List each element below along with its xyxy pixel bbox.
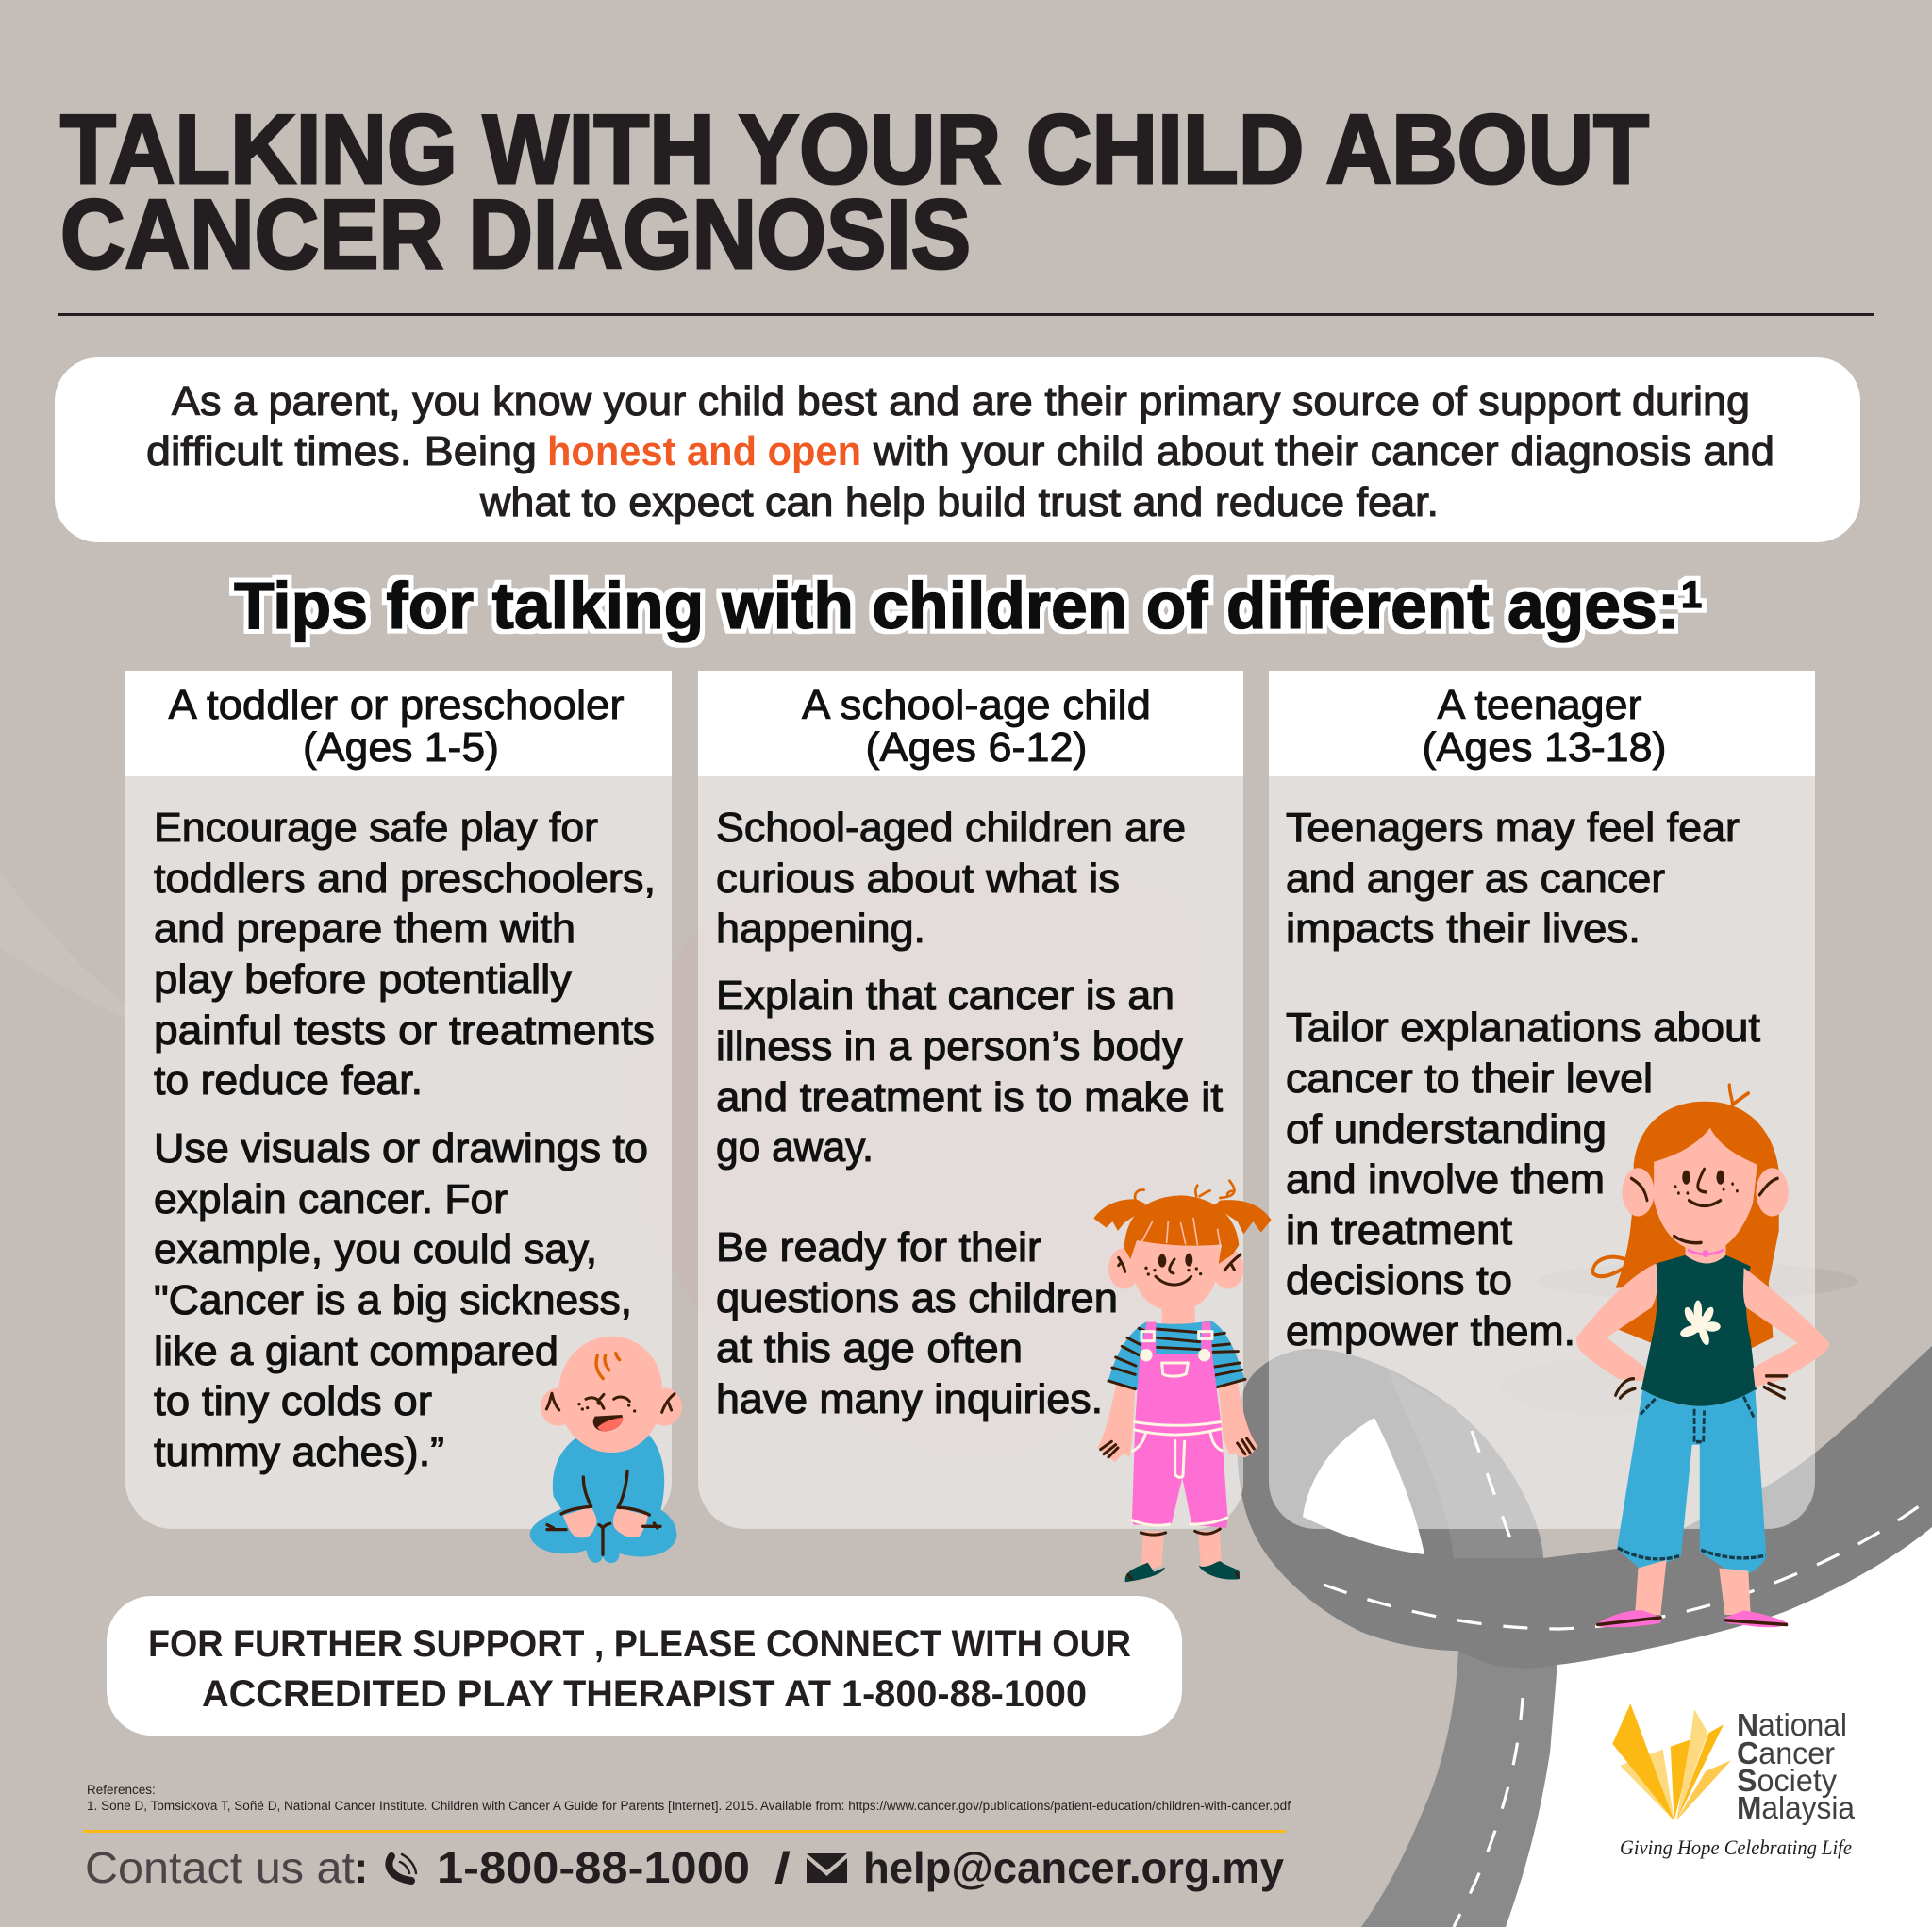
contact line: 1-800-88-1000 (437, 1843, 750, 1892)
panel: toddler or preschooler: Encourage safe play for (154, 805, 598, 851)
logo wordmark: Cancer (1737, 1736, 1835, 1770)
panel: teenager: cancer to their level (1286, 1055, 1653, 1102)
panel: teenager: Teenagers may feel fear (1286, 805, 1740, 851)
icon: envelope (807, 1853, 847, 1883)
logo fan mark (1612, 1703, 1731, 1820)
intro box: honest and open (547, 428, 861, 474)
panel: school-age child: questions as children (716, 1275, 1118, 1321)
road: lighter arm (1387, 1368, 1543, 1558)
panel: school-age child: go away. (716, 1124, 874, 1171)
panel: school-age child: Be ready for their (716, 1224, 1041, 1271)
title: CANCER DIAGNOSIS (60, 180, 971, 290)
contact line: help@cancer.org.my (863, 1843, 1284, 1892)
road: vertical stretch (1361, 1646, 1557, 1927)
panel: toddler or preschooler: explain cancer. For (154, 1176, 508, 1222)
title (60, 95, 1649, 290)
panel: teenager: in treatment (1286, 1207, 1512, 1254)
references: References: (87, 1783, 156, 1797)
panel: teenager (1269, 671, 1815, 1529)
panel: school-age child: School-aged children are (716, 805, 1186, 851)
logo wordmark: Society (1737, 1763, 1837, 1798)
tips heading: 1 (1681, 574, 1702, 616)
panel: teenager: A teenager (1438, 682, 1641, 728)
logo: National Cancer Society Malaysia (1612, 1703, 1856, 1859)
panel: teenager: decisions to (1286, 1257, 1512, 1304)
title: TALKING WITH YOUR CHILD ABOUT (60, 95, 1649, 205)
panel: toddler or preschooler (125, 671, 672, 1529)
panel: toddler or preschooler: toddlers and preschoolers, (154, 856, 656, 902)
contact line: Contact us at (85, 1843, 355, 1892)
panel: teenager: Tailor explanations about (1286, 1005, 1760, 1051)
panel: toddler or preschooler: example, you could say, (154, 1226, 597, 1272)
panel: toddler or preschooler: like a giant compared (154, 1328, 558, 1374)
girl's hair (1124, 1195, 1239, 1264)
panel: toddler or preschooler: to tiny colds or (154, 1378, 432, 1424)
panel: school-age child: A school-age child (802, 682, 1151, 728)
intro box: what to expect can help build trust and reduce fear. (479, 479, 1439, 525)
intro box: with your child about their cancer diagnosis and (873, 428, 1774, 474)
panel: school-age child: curious about what is (716, 856, 1120, 902)
panel: teenager: empower them. (1286, 1308, 1575, 1354)
road: loop and horizontal stretch (1237, 1346, 1932, 1669)
panel: school-age child: have many inquiries. (716, 1376, 1103, 1422)
illustration: baby (530, 1337, 682, 1563)
panel: school-age child: (Ages 6-12) (866, 724, 1087, 771)
contact line (85, 1843, 1284, 1892)
panel: toddler or preschooler: Use visuals or drawings to (154, 1125, 648, 1171)
road ribbon (1237, 1346, 1932, 1927)
intro box: difficult times. Being (146, 428, 537, 474)
panel: toddler or preschooler: painful tests or treatments (154, 1007, 655, 1054)
panel: teenager: and involve them (1286, 1156, 1605, 1203)
panel: teenager: impacts their lives. (1286, 905, 1641, 952)
intro box (55, 357, 1860, 542)
panel: school-age child: happening. (716, 905, 925, 952)
logo wordmark: Malaysia (1737, 1790, 1856, 1825)
intro box: As a parent, you know your child best and are their primary source of support during (172, 378, 1750, 424)
road centre dashes (1324, 1497, 1932, 1629)
contact line: / (774, 1843, 791, 1892)
panel: school-age child (698, 671, 1243, 1529)
panel: teenager: and anger as cancer (1286, 856, 1665, 902)
panel: school-age child: illness in a person’s body (716, 1023, 1183, 1070)
panel: toddler or preschooler: tummy aches).” (154, 1429, 444, 1475)
illustration: school-age girl (1093, 1181, 1272, 1582)
road: white inner hole (1303, 1418, 1424, 1554)
title rule (58, 313, 1874, 316)
support callout: FOR FURTHER SUPPORT , PLEASE CONNECT WITH OUR (148, 1623, 1131, 1665)
references (87, 1783, 1291, 1813)
support callout: ACCREDITED PLAY THERAPIST AT 1-800-88-1000 (202, 1673, 1087, 1715)
icon: phone (389, 1854, 416, 1881)
panel: school-age child: at this age often (716, 1325, 1023, 1371)
contact line: : (354, 1843, 368, 1892)
contact rule (83, 1830, 1286, 1833)
white bottom-right corner (1506, 1527, 1932, 1927)
panel: toddler or preschooler: and prepare them with (154, 905, 575, 952)
logo tagline: Giving Hope Celebrating Life (1620, 1836, 1852, 1859)
loop dashes (1472, 1431, 1510, 1538)
panel: toddler or preschooler: to reduce fear. (154, 1057, 423, 1104)
panel: school-age child: and treatment is to make it (716, 1074, 1223, 1121)
panel: toddler or preschooler: (Ages 1-5) (303, 724, 499, 771)
logo wordmark (1737, 1707, 1856, 1825)
logo wordmark: National (1737, 1707, 1847, 1742)
background watermark shapes (0, 861, 1858, 1456)
vertical road dashes (1454, 1698, 1523, 1927)
support callout (107, 1596, 1182, 1736)
panel: toddler or preschooler: "Cancer is a big sickness, (154, 1277, 632, 1323)
panel: toddler or preschooler: A toddler or preschooler (168, 682, 625, 728)
illustration: teenage girl (1576, 1085, 1829, 1627)
panel: toddler or preschooler: play before potentially (154, 956, 572, 1003)
panel: school-age child: Explain that cancer is an (716, 972, 1174, 1019)
references: 1. Sone D, Tomsickova T, Soñé D, National Cancer Institute. Children with Cancer A Guide for Parents [Internet]. 2015. Available from: https://www.cancer.gov/publications/patient-education/children-with-cancer.pdf (87, 1799, 1291, 1813)
panel: teenager: of understanding (1286, 1106, 1607, 1153)
panel: teenager: (Ages 13-18) (1423, 724, 1666, 771)
flower (1679, 1301, 1721, 1347)
tips heading: Tips for talking with children of different ages: (234, 569, 1679, 642)
